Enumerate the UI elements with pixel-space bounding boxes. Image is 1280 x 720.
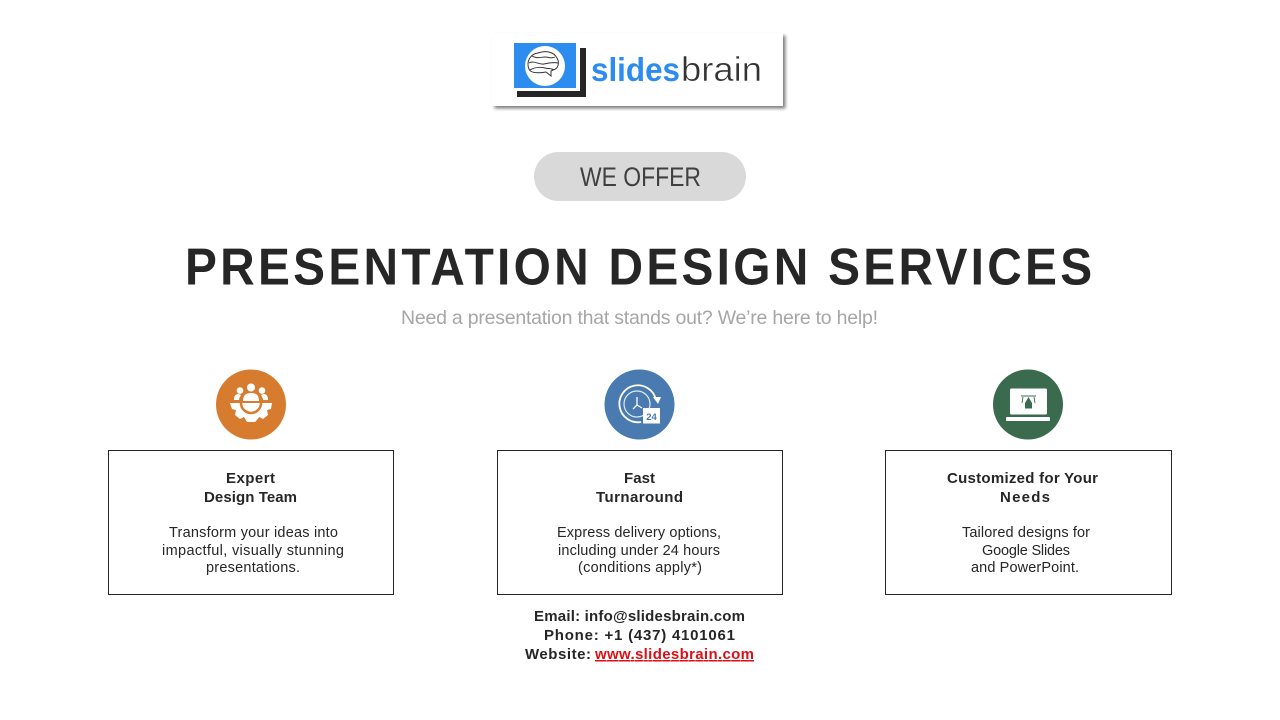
badge: we offer — [534, 152, 746, 201]
logo: slidesbrain: slides — [591, 51, 680, 88]
card: fast turnaround — [498, 450, 782, 594]
icon: 24 hour clock — [604, 370, 674, 440]
card: fast turnaround: Turnaround — [596, 489, 683, 506]
logo: slidesbrain: brain — [681, 51, 762, 89]
card: fast turnaround: Fast — [624, 470, 655, 487]
title: PRESENTATION DESIGN SERVICES — [185, 238, 1092, 296]
card: expert design team: presentations. — [206, 560, 300, 576]
card: customized for your needs: Tailored designs for — [962, 525, 1090, 541]
contact details: www.slidesbrain.com — [594, 646, 754, 663]
card: expert design team: Expert — [226, 470, 275, 487]
icon: team gear — [216, 370, 286, 440]
subtitle: Need a presentation that stands out? We’re here to help! — [401, 307, 878, 329]
icon: design laptop — [993, 370, 1063, 440]
contact details: Email: info@slidesbrain.com — [534, 608, 745, 625]
card: customized for your needs: Needs — [1000, 489, 1050, 506]
card: customized for your needs: Customized for Your — [947, 470, 1098, 487]
card: expert design team — [108, 450, 394, 594]
card: fast turnaround: Express delivery options, — [557, 525, 721, 541]
card: fast turnaround: (conditions apply*) — [578, 560, 702, 576]
contact details — [525, 608, 754, 663]
contact details: Phone: +1 (437) 4101061 — [544, 627, 735, 644]
card: customized for your needs: and PowerPoint. — [971, 560, 1079, 576]
card: expert design team: Design Team — [204, 489, 297, 506]
icon: 24 hour clock: 24 — [646, 412, 657, 423]
badge: we offer: WE OFFER — [580, 162, 701, 192]
card: customized for your needs — [886, 450, 1172, 594]
contact details: Website: — [525, 646, 591, 663]
card: customized for your needs: Google Slides — [982, 543, 1070, 559]
card: fast turnaround: including under 24 hours — [558, 543, 720, 559]
card: expert design team: Transform your ideas into — [169, 525, 338, 541]
logo: slidesbrain — [492, 33, 783, 106]
card: expert design team: impactful, visually stunning — [162, 543, 344, 559]
